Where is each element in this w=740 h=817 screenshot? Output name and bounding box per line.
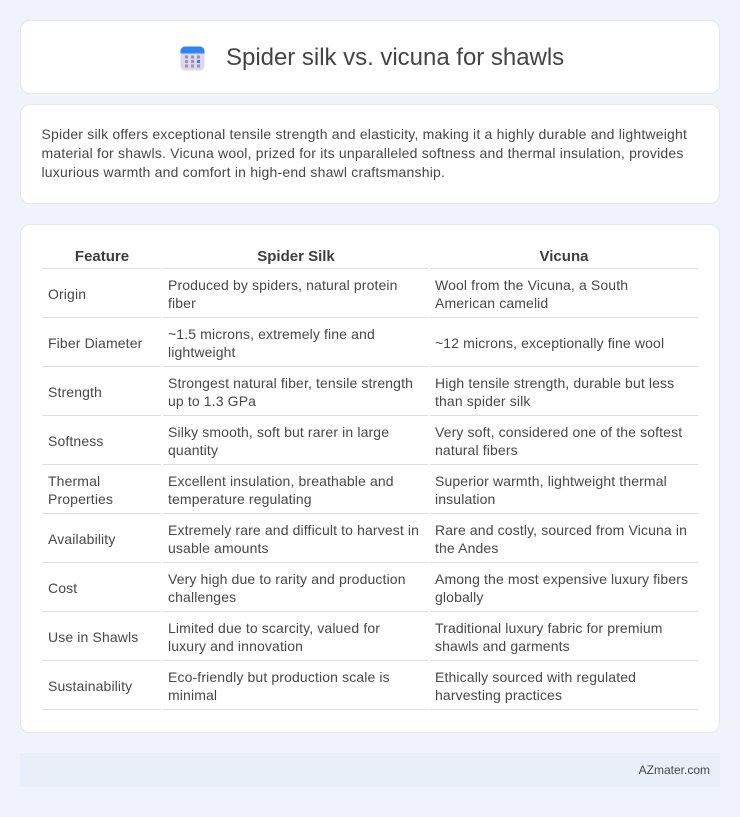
row: thermal properties bbox=[42, 473, 698, 514]
row: thermal properties: Properties bbox=[48, 491, 113, 507]
row: strength: than spider silk bbox=[435, 393, 530, 409]
row: cost: globally bbox=[435, 589, 484, 605]
row: strength: Strongest natural fiber, tensile strength bbox=[168, 375, 413, 391]
footer bar bbox=[20, 753, 720, 787]
row: fiber diameter bbox=[42, 326, 698, 367]
row: cost: Very high due to rarity and production bbox=[168, 571, 406, 587]
row: origin: Wool from the Vicuna, a South bbox=[435, 277, 628, 293]
row: availability bbox=[42, 522, 698, 563]
row: thermal properties: Excellent insulation, breathable and bbox=[168, 473, 394, 489]
row: use in shawls bbox=[42, 620, 698, 661]
row: thermal properties: Superior warmth, lightweight thermal bbox=[435, 473, 667, 489]
row: strength: High tensile strength, durable but less bbox=[435, 375, 674, 391]
summary card bbox=[20, 104, 720, 204]
icon: calendar bbox=[180, 46, 204, 70]
table header bbox=[42, 248, 698, 269]
row: use in shawls: shawls and garments bbox=[435, 638, 570, 654]
row: origin: Produced by spiders, natural protein bbox=[168, 277, 398, 293]
row: softness: Softness bbox=[48, 433, 104, 449]
title card bbox=[20, 20, 720, 94]
summary text: luxurious warmth and comfort in high-end shawl craftsmanship. bbox=[42, 164, 445, 180]
row: availability: usable amounts bbox=[168, 540, 269, 556]
row: sustainability: minimal bbox=[168, 687, 217, 703]
footer credit: AZmater.com bbox=[639, 763, 710, 777]
row: cost: challenges bbox=[168, 589, 236, 605]
row: thermal properties: temperature regulating bbox=[168, 491, 312, 507]
table header: Vicuna bbox=[540, 248, 588, 265]
row: strength bbox=[42, 375, 698, 416]
row: origin bbox=[42, 277, 698, 318]
row: softness: Very soft, considered one of the softest bbox=[435, 424, 682, 440]
row: thermal properties: Thermal bbox=[48, 473, 100, 489]
summary text: material for shawls. Vicuna wool, prized for its unparalleled softness and thermal insulation, provides bbox=[42, 145, 684, 161]
row: sustainability: harvesting practices bbox=[435, 687, 562, 703]
row: availability: the Andes bbox=[435, 540, 498, 556]
row: fiber diameter: ~12 microns, exceptionally fine wool bbox=[435, 335, 664, 351]
comparison table card bbox=[20, 224, 720, 733]
row: use in shawls: luxury and innovation bbox=[168, 638, 303, 654]
row: strength: Strength bbox=[48, 384, 102, 400]
row: sustainability: Ethically sourced with regulated bbox=[435, 669, 636, 685]
row: origin: fiber bbox=[168, 295, 196, 311]
row: availability: Rare and costly, sourced from Vicuna in bbox=[435, 522, 687, 538]
row: use in shawls: Use in Shawls bbox=[48, 629, 138, 645]
row: sustainability: Eco-friendly but production scale is bbox=[168, 669, 390, 685]
summary text: Spider silk offers exceptional tensile strength and elasticity, making it a highly durable and lightweight bbox=[42, 126, 687, 142]
row: fiber diameter: Fiber Diameter bbox=[48, 335, 142, 351]
row: fiber diameter: lightweight bbox=[168, 344, 236, 360]
row: softness bbox=[42, 424, 698, 465]
row: softness: quantity bbox=[168, 442, 218, 458]
title: Spider silk vs. vicuna for shawls bbox=[226, 44, 564, 71]
row: origin: American camelid bbox=[435, 295, 548, 311]
row: availability: Availability bbox=[48, 531, 115, 547]
row: fiber diameter: ~1.5 microns, extremely fine and bbox=[168, 326, 375, 342]
row: sustainability bbox=[42, 669, 698, 710]
row: use in shawls: Limited due to scarcity, valued for bbox=[168, 620, 380, 636]
row: use in shawls: Traditional luxury fabric for premium bbox=[435, 620, 663, 636]
table header: Spider Silk bbox=[257, 248, 335, 265]
row: cost: Among the most expensive luxury fibers bbox=[435, 571, 688, 587]
row: availability: Extremely rare and difficult to harvest in bbox=[168, 522, 419, 538]
row: cost bbox=[42, 571, 698, 612]
row: strength: up to 1.3 GPa bbox=[168, 393, 256, 409]
row: sustainability: Sustainability bbox=[48, 678, 132, 694]
row: softness: Silky smooth, soft but rarer in large bbox=[168, 424, 389, 440]
summary text bbox=[42, 126, 687, 180]
row: softness: natural fibers bbox=[435, 442, 518, 458]
row: cost: Cost bbox=[48, 580, 77, 596]
row: thermal properties: insulation bbox=[435, 491, 495, 507]
table header: Feature bbox=[75, 248, 129, 265]
row: origin: Origin bbox=[48, 286, 86, 302]
